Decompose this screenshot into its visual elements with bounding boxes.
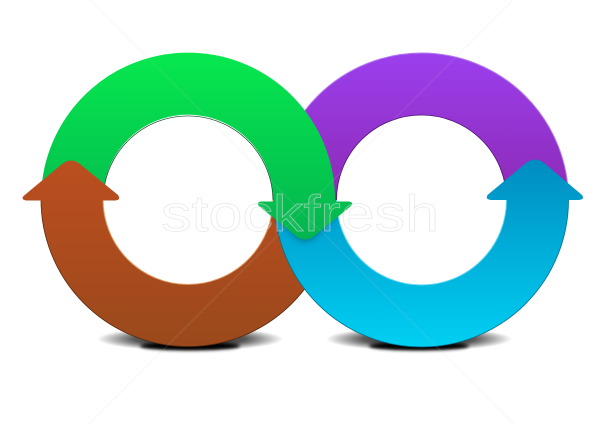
- green arrow arc: [72, 84, 304, 203]
- ground shadow: left ring: [97, 327, 283, 351]
- arrow shadow on purple arc: [504, 151, 566, 182]
- blue arrow arc: [274, 200, 568, 347]
- ground shadow: right ring: [326, 327, 512, 351]
- blue arrowhead pointing up: [487, 160, 583, 200]
- purple arc: [274, 53, 568, 200]
- brown arrowhead pointing up: [23, 160, 119, 200]
- green arrowhead pointing down: [258, 202, 352, 240]
- arrow shadow on green arc: [40, 153, 103, 182]
- watermark text: stockfresh: [161, 185, 439, 242]
- arrow shadow on blue and brown arcs: [264, 206, 346, 242]
- brown arrow arc: [41, 199, 335, 347]
- watermark diagonal lines: [89, 0, 514, 424]
